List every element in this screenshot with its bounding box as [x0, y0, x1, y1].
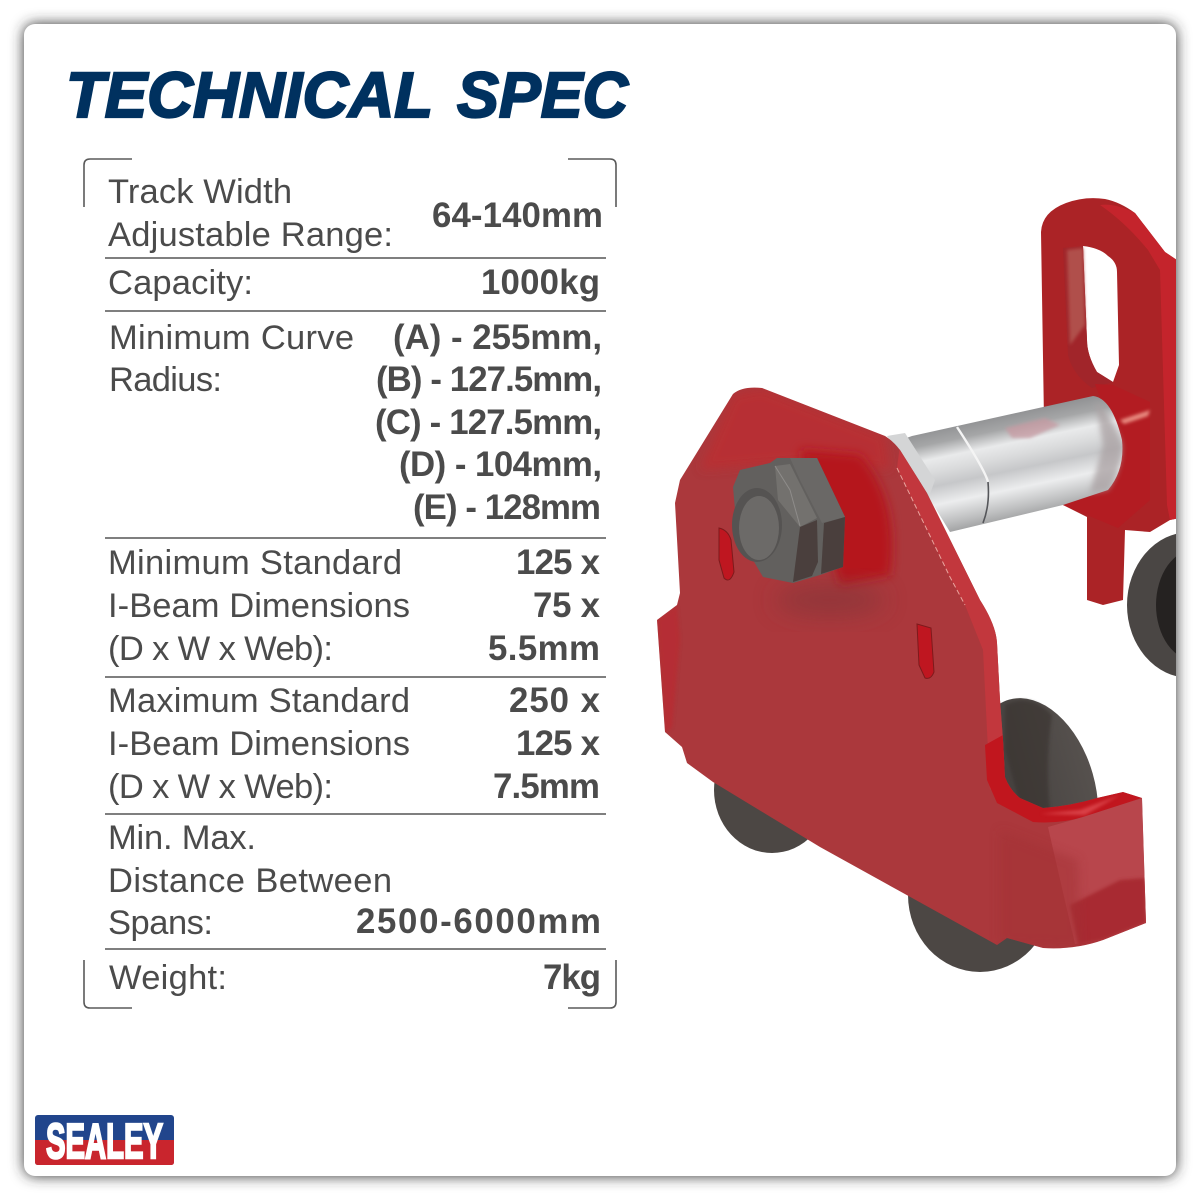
row: distance between spans: Distance Between: [108, 862, 392, 900]
title: [66, 59, 629, 131]
row: track width: Adjustable Range:: [108, 216, 393, 254]
row: weight: 7kg: [543, 958, 601, 997]
logo: Sealey: SEALEY: [46, 1115, 163, 1169]
row: weight: [109, 958, 601, 997]
row: minimum i-beam dimensions: Minimum Standard: [108, 544, 402, 582]
logo: Sealey: [35, 1115, 174, 1169]
hex nut and bolt: [732, 458, 845, 583]
row: track width: Track Width: [108, 173, 292, 211]
row: capacity: [108, 263, 600, 302]
steel axle shaft: [887, 396, 1122, 532]
rear wheel: [1127, 534, 1176, 676]
row: distance between spans: 2500-6000mm: [356, 902, 601, 941]
row: weight: Weight:: [109, 959, 227, 997]
row: minimum curve radius: [109, 318, 602, 527]
row: minimum i-beam dimensions: 125 x: [516, 543, 601, 582]
table corner brackets: [84, 159, 616, 1008]
row: minimum i-beam dimensions: (D x W x Web):: [108, 630, 333, 668]
row: minimum i-beam dimensions: 75 x: [533, 586, 601, 625]
plate slots: [719, 528, 934, 678]
title: TECHNICAL: [66, 59, 433, 131]
spec table: [84, 159, 616, 1008]
row: maximum i-beam dimensions: Maximum Standard: [108, 682, 410, 720]
row: minimum curve radius: (A) - 255mm,: [393, 318, 602, 357]
rear bracket: [1041, 198, 1180, 605]
row: minimum curve radius: (E) - 128mm: [413, 488, 601, 527]
lower left wheel: [714, 782, 808, 853]
row: capacity: Capacity:: [108, 264, 253, 302]
row: minimum i-beam dimensions: 5.5mm: [488, 629, 600, 668]
row: minimum curve radius: (B) - 127.5mm,: [376, 360, 602, 399]
row: minimum curve radius: (D) - 104mm,: [399, 445, 602, 484]
row dividers: [105, 258, 606, 949]
row: distance between spans: [108, 819, 601, 942]
lower front wheel: [908, 896, 1034, 972]
front red plate: [657, 388, 1146, 948]
far wheel: [1000, 698, 1098, 808]
row: maximum i-beam dimensions: 250 x: [509, 681, 601, 720]
row: track width: 64-140mm: [432, 196, 603, 235]
title: SPEC: [457, 59, 629, 131]
row: maximum i-beam dimensions: (D x W x Web):: [108, 768, 333, 806]
row: distance between spans: Min. Max.: [108, 819, 256, 857]
row: minimum i-beam dimensions: [108, 543, 601, 668]
row: capacity: 1000kg: [481, 263, 600, 302]
row: minimum curve radius: Radius:: [109, 361, 222, 399]
product photo: beam trolley: [657, 198, 1200, 972]
row: minimum curve radius: Minimum Curve: [109, 319, 354, 357]
row: maximum i-beam dimensions: 125 x: [516, 724, 601, 763]
row: maximum i-beam dimensions: I-Beam Dimensions: [108, 725, 410, 763]
row: minimum i-beam dimensions: I-Beam Dimensions: [108, 587, 410, 625]
row: minimum curve radius: (C) - 127.5mm,: [375, 403, 602, 442]
row: maximum i-beam dimensions: 7.5mm: [493, 767, 600, 806]
row: track width: [108, 173, 603, 254]
row: distance between spans: Spans:: [108, 904, 213, 942]
row: maximum i-beam dimensions: [108, 681, 601, 806]
